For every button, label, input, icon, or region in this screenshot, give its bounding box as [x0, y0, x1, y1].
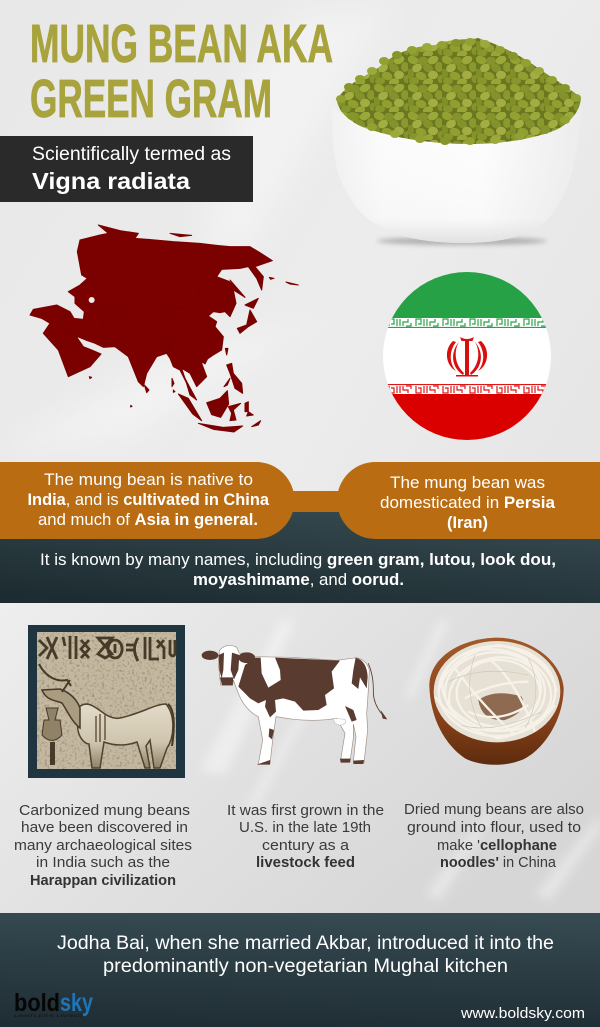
panel: domesticated in Persia: [337, 462, 600, 539]
Sri Lanka: [144, 385, 149, 393]
text: cellophane noodles: noodles' in China: [440, 855, 557, 871]
Taiwan and Hainan: [201, 348, 228, 364]
title: [30, 14, 333, 129]
text: Jodha Bai: Jodha Bai, when she married Akbar, introduced it into the: [57, 933, 554, 954]
title: GREEN GRAM: [30, 69, 272, 129]
text: livestock feed: livestock feed: [256, 855, 355, 871]
text: cellophane noodles: ground into flour, used to: [407, 820, 581, 836]
panel: domesticated in Persia: (Iran): [447, 514, 488, 532]
text: archaeological sites: have been discovered in: [21, 820, 188, 836]
Japan: [237, 298, 258, 333]
panel: native to India: India, and is cultivated in China: [28, 491, 270, 509]
beans along edge: [336, 38, 581, 145]
emblem: [447, 337, 487, 376]
text: archaeological sites: Carbonized mung beans: [19, 803, 190, 819]
panel: scientific name: Vigna radiata: [32, 168, 190, 194]
Philippines: [224, 363, 243, 393]
Borneo: [207, 391, 229, 417]
panel: dark names band: It is known by many names, including green gram, lutou, look dou,: [40, 551, 556, 569]
icon: Harappan seal: [28, 625, 185, 778]
text: livestock feed: U.S. in the late 19th: [239, 820, 371, 836]
icon: Iran flag: [380, 270, 555, 444]
icon: bowl of cellophane noodles: [429, 638, 564, 765]
title: MUNG BEAN AKA: [30, 14, 333, 74]
text: archaeological sites: in India such as the: [36, 855, 170, 871]
panel: native to India: The mung bean is native to: [44, 471, 253, 489]
panel: native to India: and much of Asia in general.: [38, 511, 258, 529]
panel: footer band: [0, 913, 600, 1027]
text: livestock feed: [227, 803, 384, 871]
panel: domesticated in Persia: domesticated in Persia: [380, 494, 556, 512]
panel: dark names band: moyashimame, and oorud.: [193, 571, 404, 589]
text: livestock feed: It was first grown in the: [227, 803, 384, 819]
text: cellophane noodles: Dried mung beans are also: [404, 802, 584, 818]
text: archaeological sites: many archaeological sites: [14, 838, 192, 854]
panel: scientific name: Scientifically termed as: [32, 144, 231, 165]
panel: scientific name: [0, 136, 253, 202]
panel: orange connector: [280, 491, 350, 512]
logo: boldsky: [14, 989, 93, 1018]
logo: boldsky: LIMITLESS LIVING: [14, 1013, 82, 1018]
small islands: [89, 277, 298, 427]
panel: native to India: [0, 462, 294, 539]
text: Jodha Bai: [57, 933, 554, 977]
text: cellophane noodles: make 'cellophane: [437, 838, 557, 854]
map of Asia: [30, 224, 299, 432]
text: archaeological sites: Harappan civilization: [30, 873, 176, 889]
Sumatra and Java: [178, 394, 243, 432]
seal script: [39, 636, 175, 661]
Siberian islands: [170, 233, 192, 237]
text: archaeological sites: [14, 803, 192, 889]
Sulawesi: [228, 403, 241, 421]
Aral sea: [89, 297, 95, 303]
incense stand: [42, 708, 62, 765]
logo: boldsky: sky: [60, 989, 93, 1017]
text: Jodha Bai: predominantly non-vegetarian Mughal kitchen: [103, 956, 508, 977]
bull figure: [39, 664, 174, 768]
icon: bowl of mung beans: [330, 30, 590, 245]
panel: dark names band: [0, 512, 600, 603]
Sakhalin: [230, 280, 245, 297]
text: livestock feed: century as a: [262, 838, 350, 854]
text: website: www.boldsky.com: [460, 1005, 585, 1022]
icon: cow: [202, 645, 388, 765]
text: cellophane noodles: [404, 802, 584, 871]
beans mound: [337, 38, 581, 144]
logo: boldsky: bold: [14, 989, 60, 1017]
panel: domesticated in Persia: The mung bean was: [390, 474, 545, 492]
mainland Asia: [30, 225, 272, 387]
